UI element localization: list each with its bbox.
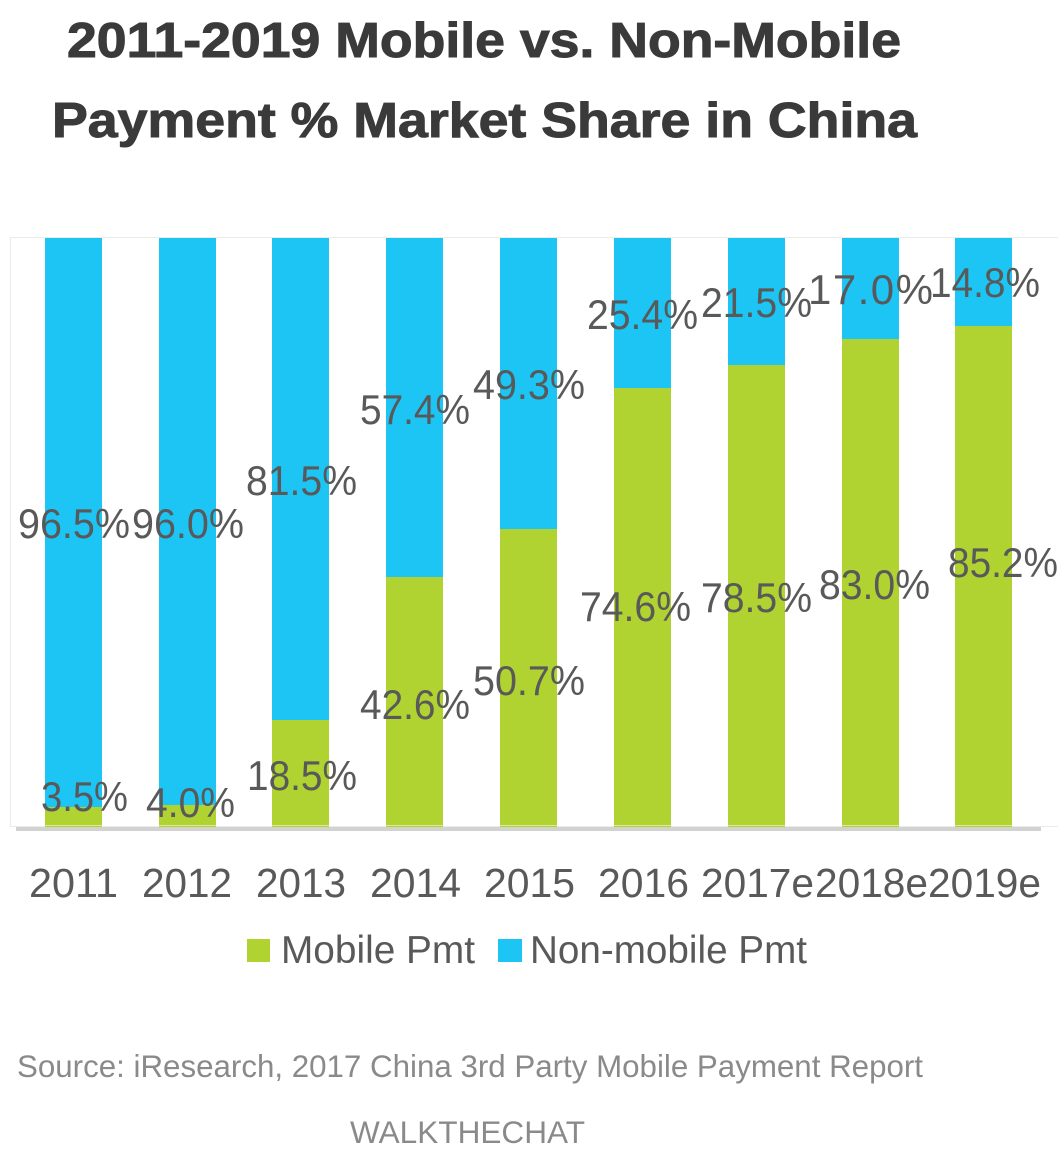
x-axis year labels: 2013	[256, 860, 346, 906]
bar: 2012	[159, 238, 216, 827]
mobile value labels: 4.0%	[146, 779, 235, 826]
legend	[247, 929, 807, 972]
mobile value labels: 74.6%	[580, 583, 691, 630]
non-mobile value labels: 96.0%	[132, 500, 244, 547]
non-mobile value labels	[18, 259, 1040, 547]
bar: 2015	[500, 238, 557, 827]
mobile value labels	[41, 539, 1058, 826]
stacked bar chart	[10, 238, 1058, 906]
non-mobile value labels: 25.4%	[587, 291, 698, 338]
bar: 2019e	[955, 238, 1012, 827]
x-axis year labels: 2017e	[701, 860, 814, 906]
x-axis year labels: 2014	[370, 860, 461, 906]
mobile value labels: 83.0%	[819, 561, 930, 608]
non-mobile value labels: 57.4%	[360, 386, 470, 433]
x-axis year labels: 2011	[29, 860, 118, 906]
x-axis year labels: 2016	[598, 860, 689, 906]
bar: 2017e	[728, 238, 785, 827]
brand credit: WALKTHECHAT	[350, 1114, 585, 1150]
x-axis year labels: 2015	[484, 860, 575, 906]
x-axis year labels: 2019e	[928, 860, 1041, 906]
mobile value labels: 3.5%	[41, 773, 128, 820]
x-axis year labels: 2012	[142, 860, 232, 906]
title: 2011-2019 Mobile vs. Non-Mobile	[67, 14, 901, 68]
non-mobile value labels: 17.0%	[808, 266, 933, 313]
bar: 2016	[614, 238, 671, 827]
mobile value labels: 18.5%	[247, 752, 357, 799]
bar: 2013	[272, 238, 329, 827]
title	[52, 14, 918, 148]
x-axis year labels	[29, 860, 1041, 906]
non-mobile value labels: 96.5%	[18, 500, 130, 547]
title: Payment % Market Share in China	[52, 94, 918, 148]
mobile value labels: 78.5%	[701, 574, 812, 621]
mobile value labels: 50.7%	[473, 657, 585, 704]
source note: Source: iResearch, 2017 China 3rd Party Mobile Payment Report	[17, 1048, 923, 1084]
non-mobile value labels: 49.3%	[473, 361, 585, 408]
non-mobile value labels: 21.5%	[701, 279, 812, 326]
bar: 2014	[386, 238, 443, 827]
non-mobile value labels: 81.5%	[246, 457, 357, 504]
bar: 2011	[45, 238, 102, 827]
mobile value labels: 42.6%	[360, 681, 470, 728]
legend: mobile payment: Mobile Pmt	[281, 929, 475, 972]
bar: 2018e	[842, 238, 899, 827]
non-mobile value labels: 14.8%	[930, 259, 1040, 306]
legend: non-mobile payment: Non-mobile Pmt	[530, 929, 807, 972]
x-axis year labels: 2018e	[815, 860, 928, 906]
